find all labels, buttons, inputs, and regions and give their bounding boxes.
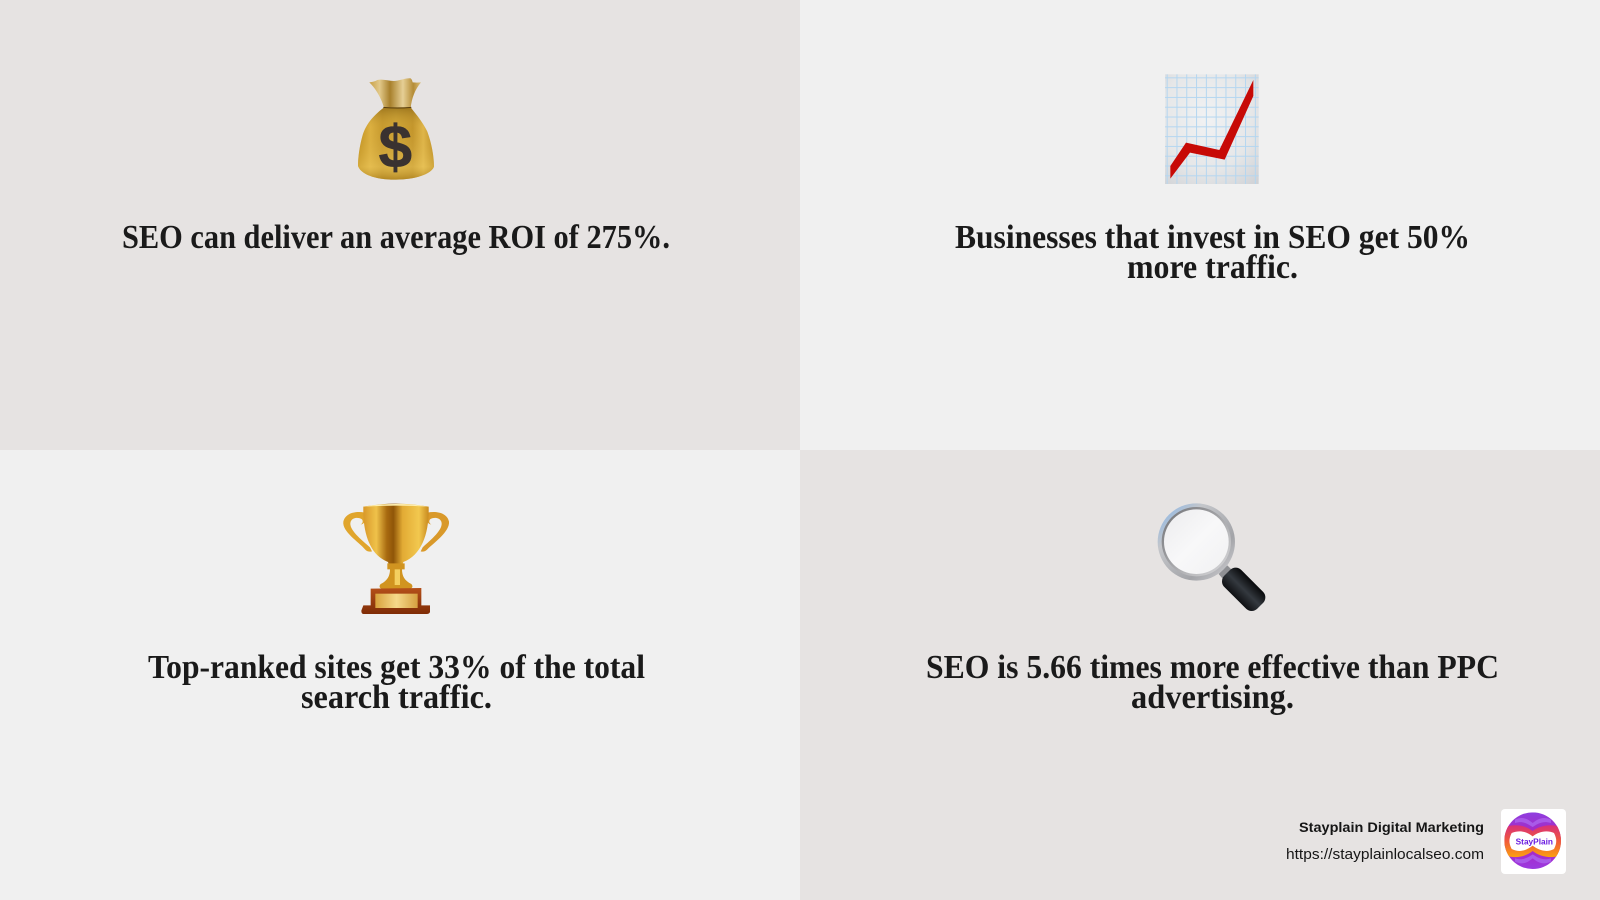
logo: StayPlain: StayPlain	[1516, 837, 1553, 846]
icon: magnifying glass	[1158, 503, 1269, 614]
heading: traffic stat	[955, 219, 1470, 286]
heading: top-ranked stat	[148, 649, 645, 716]
icon: trophy	[343, 504, 449, 614]
panel: traffic	[800, 0, 1600, 450]
heading: top-ranked stat: Top-ranked sites get 33% of the total	[148, 649, 645, 686]
panel: top-ranked	[0, 450, 800, 900]
panel: ROI	[0, 0, 800, 450]
icon: money bag: $	[379, 113, 412, 180]
logo: StayPlain	[1501, 809, 1566, 874]
footer: brand name: Stayplain Digital Marketing	[1299, 819, 1484, 835]
heading: ROI stat: SEO can deliver an average ROI of 275%.	[122, 219, 670, 256]
heading: top-ranked stat: search traffic.	[301, 679, 492, 716]
icon: chart increasing	[1165, 74, 1259, 184]
icon: money bag	[358, 78, 434, 180]
heading: traffic stat: more traffic.	[1127, 249, 1298, 286]
heading: traffic stat: Businesses that invest in SEO get 50%	[955, 219, 1470, 256]
heading: PPC stat	[926, 649, 1499, 716]
heading: PPC stat: SEO is 5.66 times more effective than PPC	[926, 649, 1499, 686]
panel: PPC comparison	[800, 450, 1600, 900]
heading: PPC stat: advertising.	[1131, 679, 1294, 716]
footer: website url: https://stayplainlocalseo.com	[1286, 847, 1484, 863]
